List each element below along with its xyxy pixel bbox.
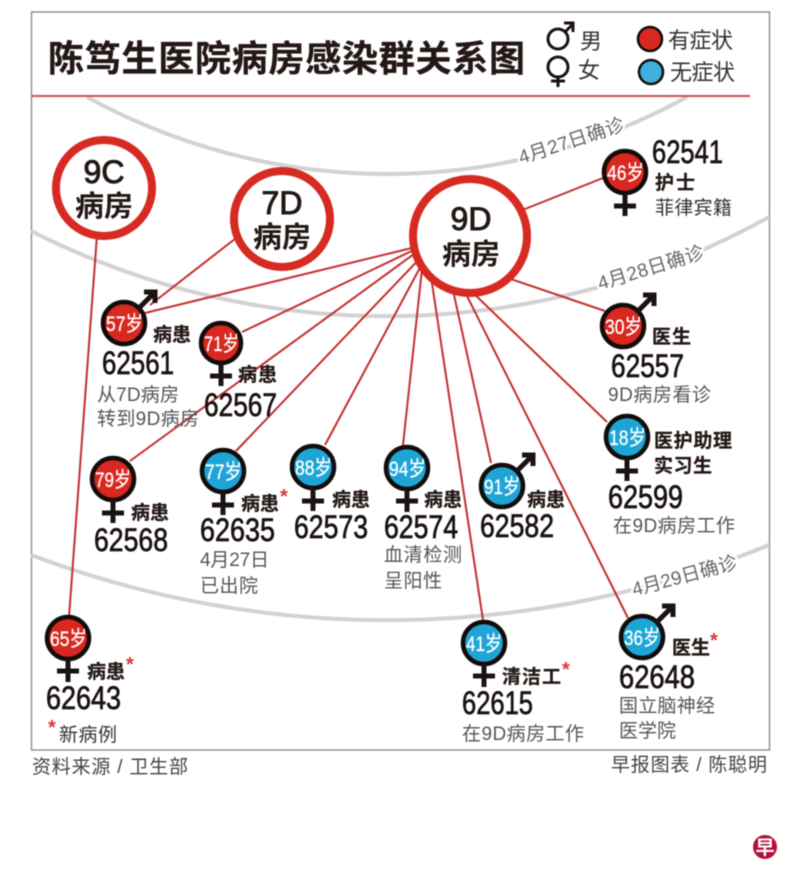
patient 62568: 79岁 [95,469,131,492]
patient 62615: * [562,659,570,681]
patient 62582: 病患 [527,488,565,511]
legend label: female: 女 [578,58,600,83]
patient 62635: 病患 [241,492,279,515]
patient 62635: 4月27日 [200,550,269,571]
graphic credit: 早报图表 / 陈聪明 [611,754,767,776]
patient 62541: 菲律宾籍 [655,197,732,219]
patient 62648: 36岁 [624,627,660,650]
patient 62574: 62574 [384,509,458,545]
patient 62635: 62635 [200,512,275,548]
patient 62582: 62582 [480,508,554,544]
patient 62557: 9D病房看诊 [608,384,711,406]
patient 62635: * [280,486,288,508]
patient 62568: 病患 [131,501,169,524]
patient 62599 [606,416,735,537]
patient 62648 [619,606,718,742]
patient 62573: 88岁 [295,457,332,480]
patient 62635: 77岁 [205,461,242,484]
icon: female symbol [548,57,568,87]
icon: newspaper logo: 早 [755,838,775,859]
footnote: new case: * [48,717,56,739]
patient 62648: 62648 [619,659,695,695]
ward circle: 9C: 9C [84,154,124,190]
patient 62561: 从7D病房 [97,384,179,406]
patient 62574: 病患 [424,488,462,511]
patient 62643 [46,617,134,716]
patient 62573 [292,446,370,545]
patient 62568 [92,458,169,558]
patient 62615: 62615 [462,685,533,721]
ward circle: 9C: 病房 [75,190,133,223]
patient 62541: 62541 [652,134,723,170]
patient 62648: 医生 [672,637,710,659]
icon: red dot [638,27,662,51]
legend label: symptomatic: 有症状 [668,28,733,53]
legend label: male: 男 [580,29,602,54]
patient 62574: 94岁 [389,458,426,481]
connection lines [69,178,628,620]
ward circle: 9D: 病房 [442,238,500,271]
footnote: new case: 新病例 [59,724,117,746]
patient 62615: 41岁 [466,633,502,656]
patient 62567: 病患 [238,363,277,386]
patient 62599: 在9D病房工作 [613,515,735,537]
ward circle: 9D: 9D [451,201,491,237]
patient 62615 [462,622,584,745]
patient 62643: * [126,654,134,676]
icon: newspaper logo [753,835,777,859]
patient 62599: 62599 [608,479,683,515]
patient 62541: 46岁 [607,162,644,185]
legend label: asymptomatic: 无症状 [670,60,735,85]
icon: male symbol [548,23,573,49]
patient 62582 [480,455,565,544]
source credit: 资料来源 / 卫生部 [32,756,188,778]
patient 62561: 57岁 [106,313,143,336]
date label: April 29: 4月29日确诊 [630,552,740,601]
patient 62541 [604,134,732,219]
title: 陈笃生医院病房感染群关系图 [48,38,525,79]
patient 62561: 病患 [153,323,191,346]
patient 62561: 转到9D病房 [97,408,199,430]
patient 62599: 实习生 [654,454,712,477]
patient 62643: 62643 [46,680,121,716]
date label: April 27: 4月27日确诊 [516,114,627,169]
patient 62567 [201,323,277,423]
patient 62541: 护士 [655,172,695,194]
patient 62561 [97,292,199,430]
patient 62599: 18岁 [609,427,646,450]
patient 62557 [602,295,711,406]
ward circle: 9C [56,140,152,236]
patient 62635: 已出院 [200,575,258,597]
patient 62561: 62561 [102,345,174,381]
patient 62599: 医护助理 [654,430,732,452]
patient 62574 [384,447,462,592]
patient 62567: 62567 [204,387,277,423]
patient 62574: 血清检测 [384,544,462,566]
patient 62615: 清洁工 [502,666,561,688]
patient 62557: 62557 [611,348,684,384]
icon: blue dot [639,60,663,84]
footnote: new case [48,717,117,746]
patient 62635 [200,450,288,597]
patient 62573: 62573 [294,509,368,545]
ward circle: 7D: 病房 [253,221,311,254]
patient 62567: 71岁 [204,333,239,356]
legend [548,23,735,87]
patient 62557: 30岁 [605,316,642,339]
patient 62582: 91岁 [484,476,520,499]
patient 62648: 国立脑神经 [619,695,715,717]
ward circle: 7D: 7D [262,185,302,221]
patient 62648: * [710,630,718,652]
patient 62557: 医生 [652,326,691,348]
ward circle: 7D [234,171,330,267]
patient 62568: 62568 [94,522,168,558]
patient 62648: 医学院 [619,720,676,742]
patient 62615: 在9D病房工作 [462,723,584,745]
patient 62573: 病患 [332,488,370,511]
date label: April 28: 4月28日确诊 [595,242,707,295]
patient 62643: 病患 [87,660,125,683]
patient 62574: 呈阳性 [384,570,442,592]
ward circle: 9D [413,179,527,293]
patient 62643: 65岁 [50,628,87,651]
